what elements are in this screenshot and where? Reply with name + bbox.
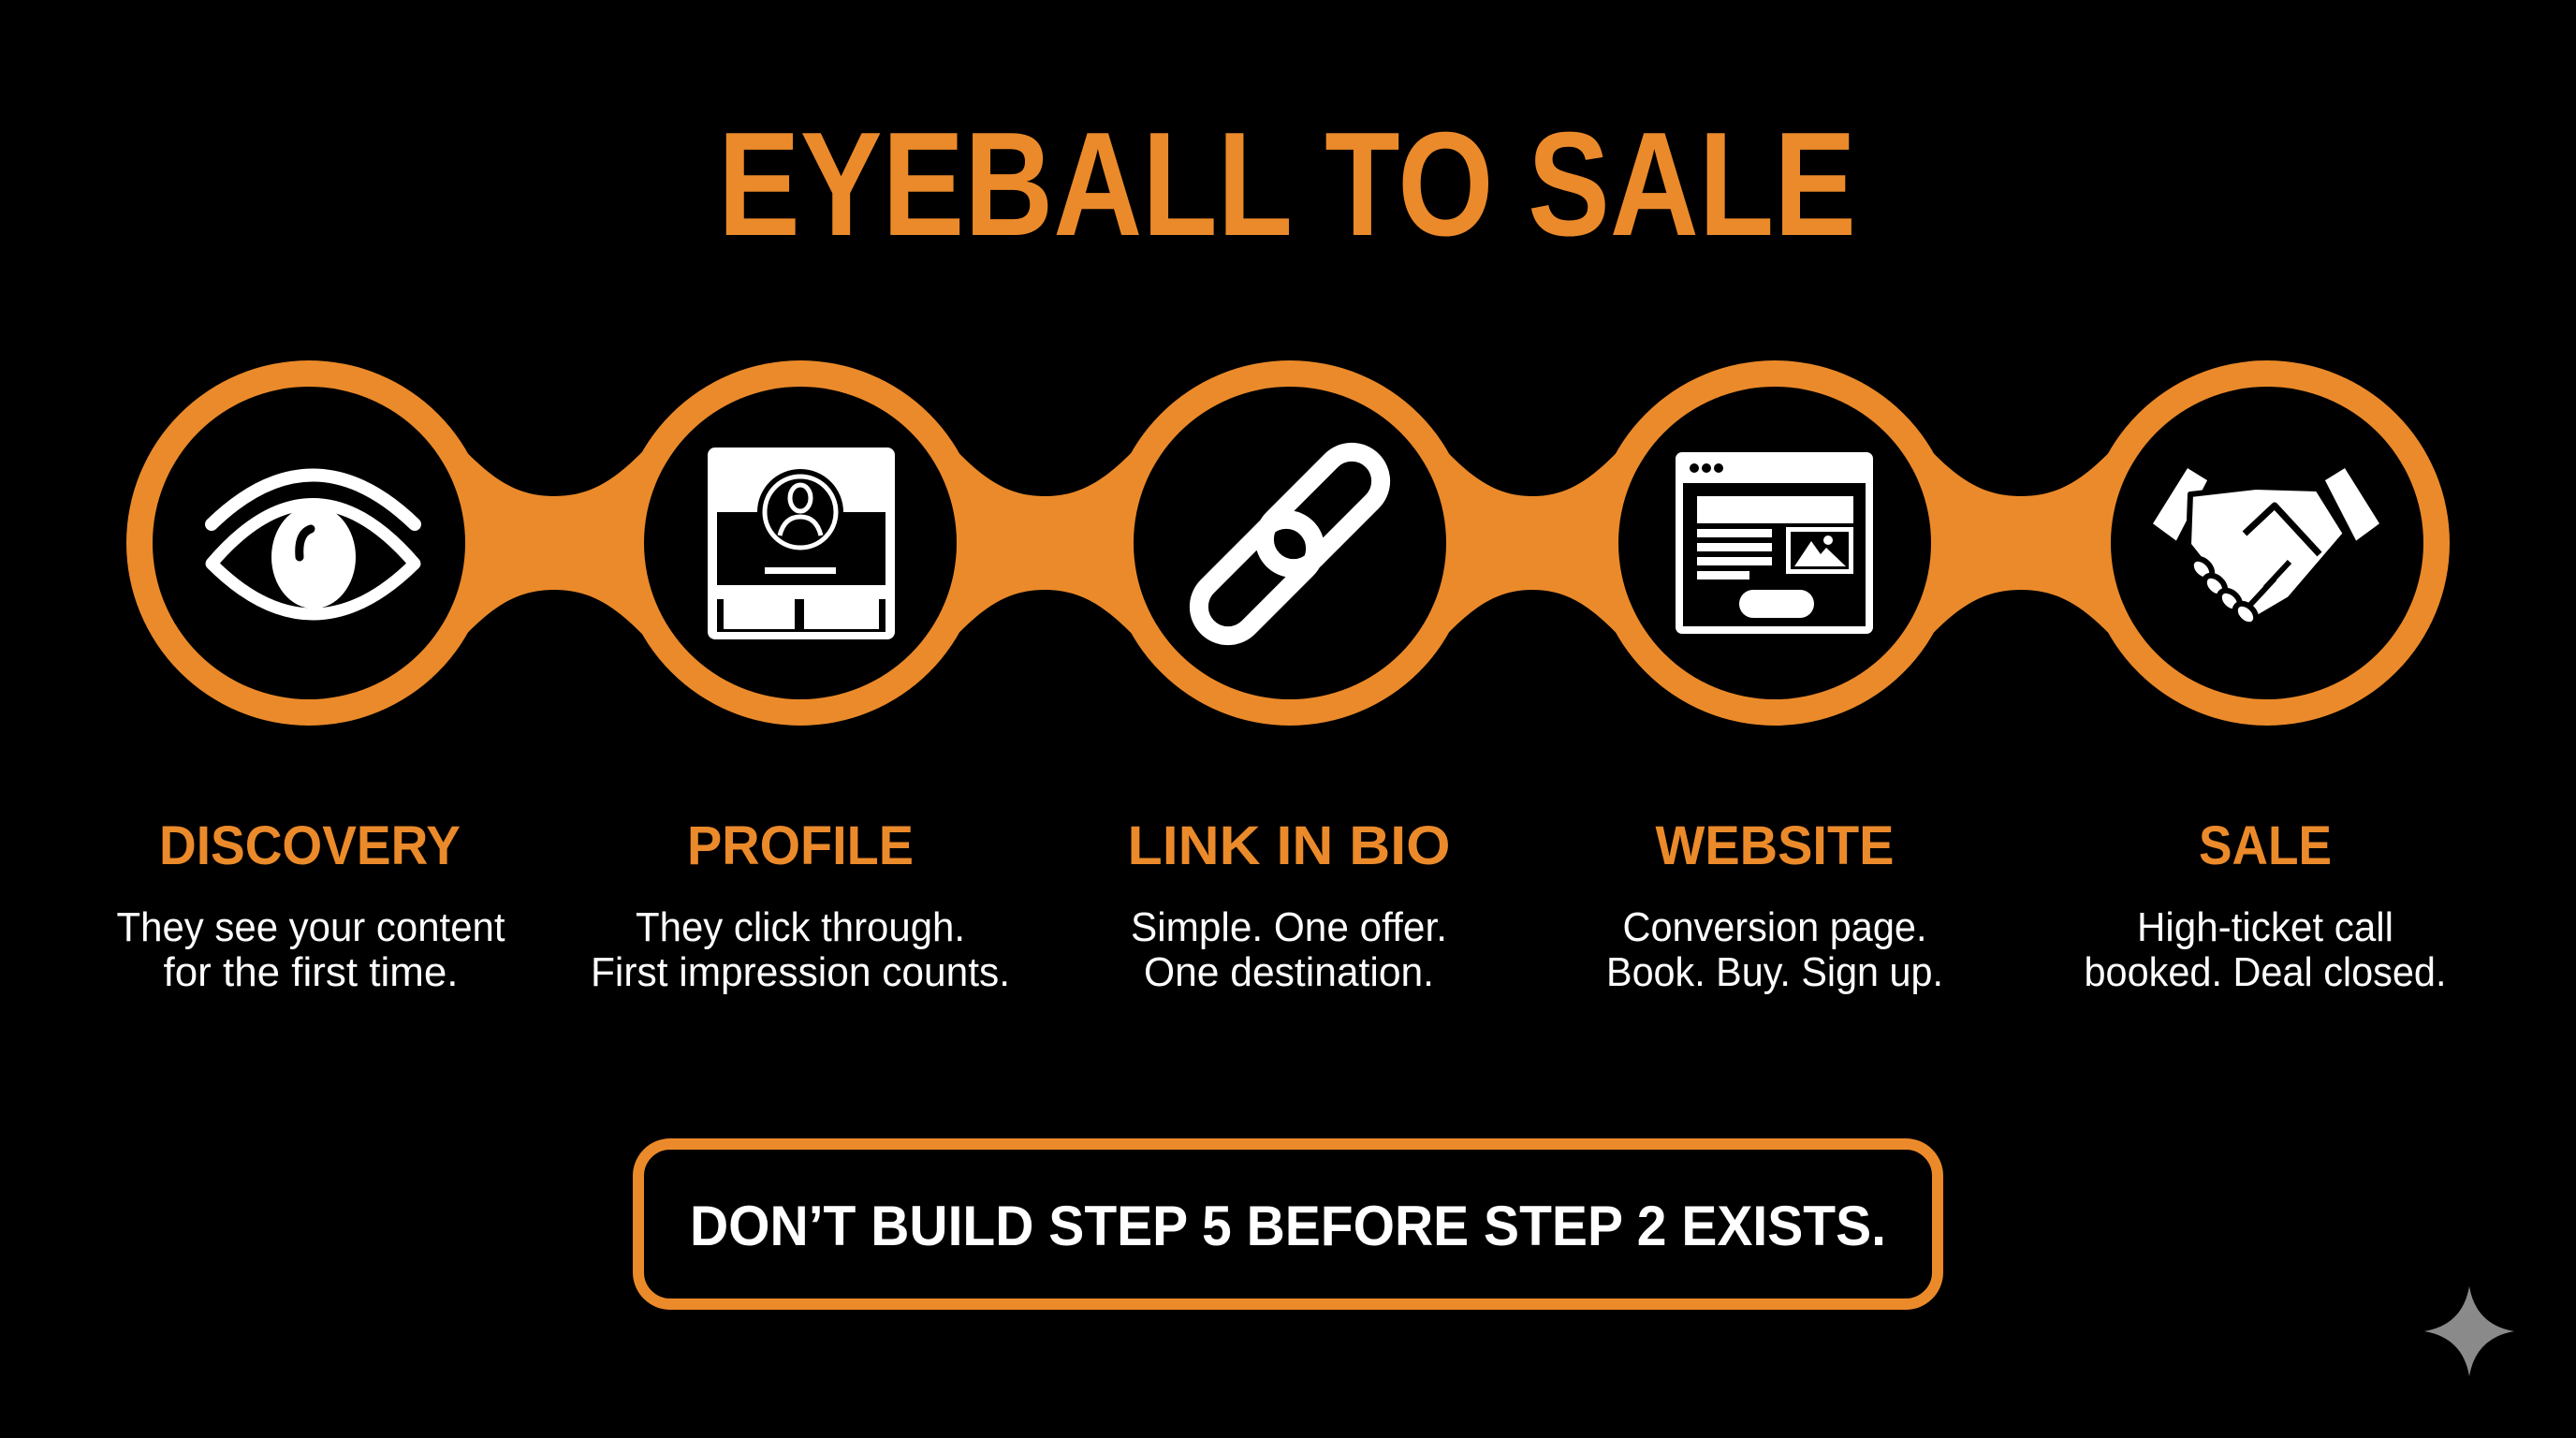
icon: chain link — [1187, 440, 1393, 648]
title: EYEBALL TO SALE — [718, 102, 1856, 267]
step 2 label: They click through. — [636, 904, 965, 950]
step 1 label: They see your content — [116, 904, 505, 950]
icon: profile card — [708, 448, 895, 639]
step 1 label — [116, 815, 505, 995]
step 2 label: PROFILE — [687, 815, 914, 876]
step 5 label: booked. Deal closed. — [2084, 949, 2447, 995]
step 4 label: Conversion page. — [1623, 904, 1926, 950]
step 4 label — [1606, 815, 1943, 995]
icon: handshake — [2149, 464, 2383, 629]
step 5 label: SALE — [2199, 815, 2332, 876]
step 3 label — [1127, 815, 1451, 995]
step 1 label: DISCOVERY — [159, 815, 461, 876]
step 4 label: Book. Buy. Sign up. — [1606, 949, 1943, 995]
step 5 label: High-ticket call — [2137, 904, 2393, 950]
step 2 label: First impression counts. — [591, 949, 1010, 995]
step 4 label: WEBSITE — [1655, 815, 1895, 876]
step 1 label: for the first time. — [163, 949, 459, 995]
icon: sparkle — [2424, 1286, 2514, 1376]
callout box: DON’T BUILD STEP 5 BEFORE STEP 2 EXISTS. — [690, 1195, 1886, 1257]
step 3 label: One destination. — [1144, 949, 1434, 995]
funnel chain — [126, 360, 2450, 726]
callout box — [638, 1144, 1938, 1304]
step 3 label: LINK IN BIO — [1127, 815, 1451, 876]
step 3 label: Simple. One offer. — [1131, 904, 1447, 950]
icon: website — [1676, 452, 1873, 634]
step 2 label — [591, 815, 1010, 995]
icon: eye — [212, 476, 415, 614]
step 5 label — [2084, 815, 2447, 995]
